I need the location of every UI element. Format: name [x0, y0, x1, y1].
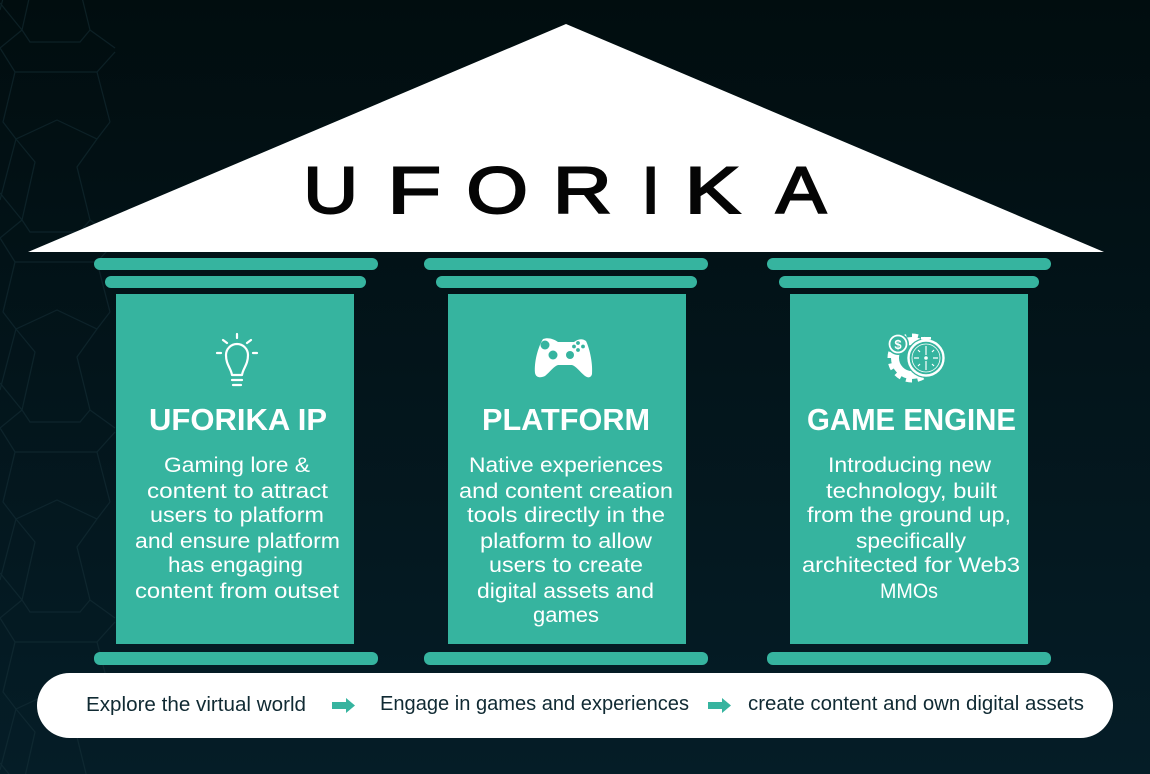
logo: UFORIKA: O: [466, 154, 528, 227]
text: Game Engine description: Introducing new: [828, 454, 992, 477]
logo: UFORIKA: U: [303, 155, 358, 228]
bottom journey banner: [37, 673, 1113, 738]
logo: UFORIKA: A: [776, 153, 827, 227]
text: Game Engine description: technology, built: [826, 480, 997, 503]
icon: light bulb: [217, 334, 257, 385]
text: Uforika IP description: content to attract: [147, 480, 328, 503]
text: Game Engine description: MMOs: [880, 580, 938, 603]
pillar: Uforika IP: [94, 258, 378, 665]
text: Platform description: Native experiences: [469, 454, 663, 477]
text: Uforika IP description: Gaming lore &: [164, 454, 310, 477]
heading: Uforika IP: UFORIKA IP: [149, 402, 327, 437]
text: engage: Engage in games and experiences: [380, 693, 689, 715]
logo: UFORIKA: R: [553, 154, 612, 227]
arrow: engage to create: [708, 698, 731, 713]
text: Platform description: users to create: [489, 554, 643, 577]
text: explore: Explore the virtual world: [86, 694, 306, 716]
logo: UFORIKA: I: [642, 153, 660, 227]
text: Platform description: games: [533, 604, 599, 627]
text: Game Engine description: specifically: [856, 530, 967, 553]
text: Platform description: tools directly in the: [467, 504, 665, 527]
roof triangle: [28, 24, 1104, 252]
icon: game controller: [535, 338, 592, 377]
arrow: explore to engage: [332, 698, 355, 713]
pillar: Platform: [424, 258, 708, 665]
text: Game Engine description: architected for Web3: [802, 554, 1020, 577]
icon: gear, coin and stopwatch: $: [894, 337, 902, 352]
text: Game Engine description: [802, 454, 1020, 603]
logo: UFORIKA: F: [387, 153, 441, 227]
text: Platform description: platform to allow: [480, 530, 653, 553]
text: Platform description: [459, 454, 673, 627]
logo: UFORIKA: [303, 153, 827, 228]
heading: Platform: PLATFORM: [482, 402, 650, 437]
text: create: create content and own digital assets: [748, 693, 1084, 715]
text: Platform description: digital assets and: [477, 580, 654, 603]
text: Uforika IP description: [135, 454, 340, 603]
icon: gear, coin and stopwatch: [887, 333, 946, 380]
text: Game Engine description: from the ground up,: [807, 504, 1011, 527]
text: Uforika IP description: has engaging: [168, 554, 303, 577]
heading: Game Engine: GAME ENGINE: [807, 402, 1016, 437]
pillar: Game Engine: [767, 258, 1051, 665]
text: Platform description: and content creation: [459, 480, 673, 503]
logo: UFORIKA: K: [685, 153, 740, 227]
text: Uforika IP description: content from outset: [135, 580, 339, 603]
text: Uforika IP description: users to platform: [150, 504, 324, 527]
text: Uforika IP description: and ensure platform: [135, 530, 340, 553]
